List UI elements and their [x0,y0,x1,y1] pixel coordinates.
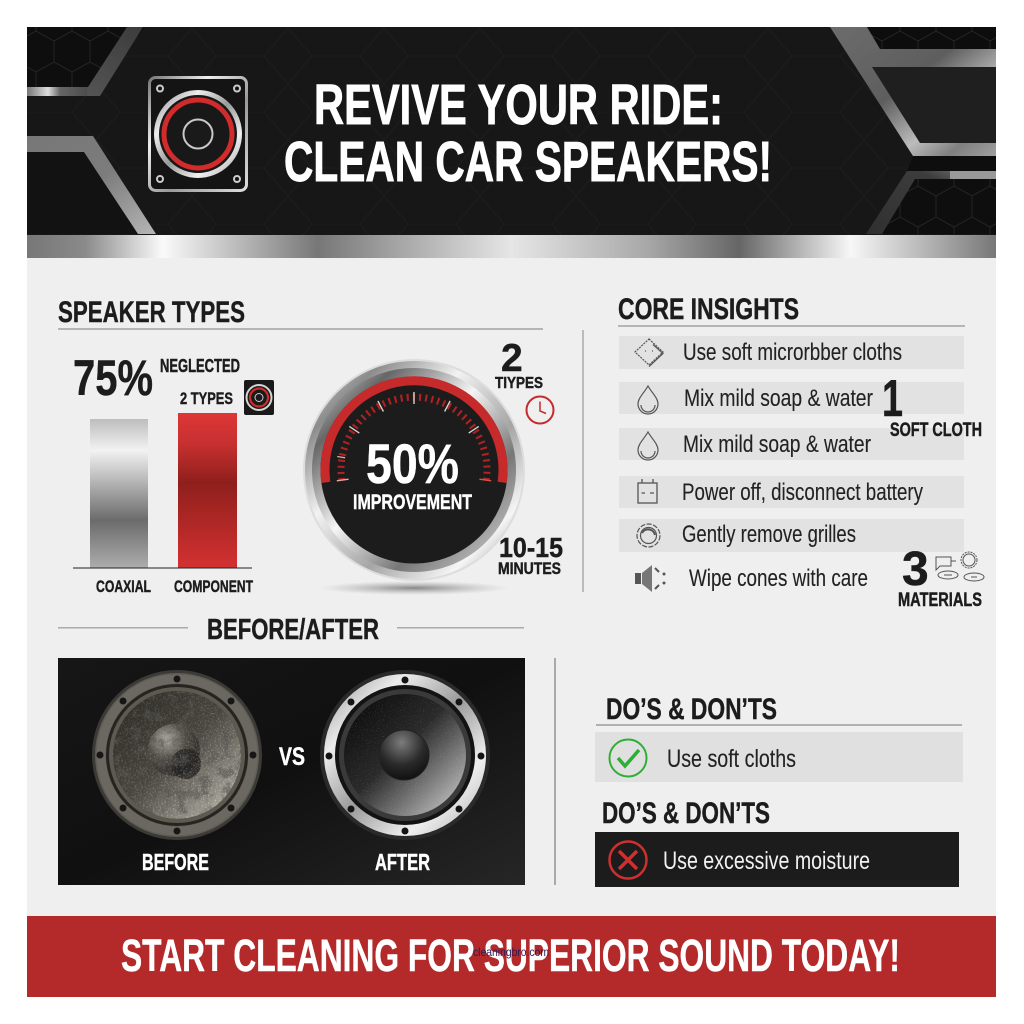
metallic strip [27,235,996,258]
stat: 75%: 75% [73,350,153,406]
stat: 1 soft cloth [882,370,982,441]
stat: 1 soft cloth: 1 [882,370,903,428]
label: before: BEFORE [142,849,209,875]
icon: small speaker [244,380,274,415]
heading: do's and don'ts repeat: DO’S & DON’TS [602,797,770,830]
gauge: 50% improvement [304,360,524,595]
title [284,73,772,194]
heading: speaker types: SPEAKER TYPES [58,296,245,329]
stat: 2 types [495,337,543,392]
bar chart: speaker types [73,350,253,596]
icon: materials [936,552,984,581]
label: after: AFTER [375,849,430,875]
stat: 10-15 minutes: 10-15 [499,532,563,563]
title: CLEAN CAR SPEAKERS! [284,130,772,194]
heading: do's and don'ts: DO’S & DON’TS [606,693,777,726]
row: disconnect battery [619,476,964,508]
speaker: after [320,670,490,840]
stat: 2 types: 2 [501,337,523,380]
row: wipe cones [635,565,868,592]
header banner [27,27,996,235]
icon: clock [526,396,554,424]
gauge ticks [337,392,491,481]
row: mild soap and water [619,382,964,414]
stat: 2 types: TIYPES [495,375,543,392]
footer banner [27,916,996,997]
stat: 10-15 minutes: MINUTES [498,559,561,578]
row: mild soap and water repeat [619,428,964,460]
row: wipe cones: Wipe cones with care [689,565,868,592]
bar: component [178,413,237,568]
stat: 10-15 minutes [498,532,563,578]
label: component: COMPONENT [174,578,253,596]
label: coaxial: COAXIAL [96,578,151,596]
watermark: cleaningbro.com [473,945,549,959]
stat: 3 materials: 3 [902,543,929,596]
row: microfiber cloths [619,336,964,369]
panel: before and after [58,658,525,885]
icon: cross [610,842,646,878]
bar: coaxial [90,419,148,568]
row: microfiber cloths: Use soft microrbber cloths [683,339,902,366]
title: REVIVE YOUR RIDE: [314,73,723,137]
label: 2 types: 2 TYPES [180,389,233,408]
stat: 3 materials: MATERIALS [898,590,982,611]
heading: core insights: CORE INSIGHTS [618,293,799,326]
row: remove grilles [619,519,964,552]
row: mild soap and water repeat: Mix mild soap & water [683,431,871,458]
stat: 3 materials [898,543,982,611]
row: disconnect battery: Power off, disconnect battery [682,479,923,506]
gauge red arc [325,381,503,482]
text: use excessive moisture: Use excessive moisture [663,847,870,875]
icon: header speaker [150,78,246,190]
stat: 1 soft cloth: SOFT CLOTH [890,420,982,441]
speaker: before [92,670,262,840]
label: vs: VS [279,743,305,771]
label: neglected: NEGLECTED [160,356,240,376]
list: core insights [619,336,964,592]
callout: do [595,732,963,782]
heading: before/after: BEFORE/AFTER [207,614,379,646]
gauge label: IMPROVEMENT [353,491,472,514]
text: use soft cloths: Use soft cloths [667,745,796,773]
gauge value: 50% [366,432,459,495]
icon: check [610,740,646,776]
callout: don't [595,832,959,887]
row: mild soap and water: Mix mild soap & water [684,385,873,412]
row: remove grilles: Gently remove grilles [682,521,856,548]
